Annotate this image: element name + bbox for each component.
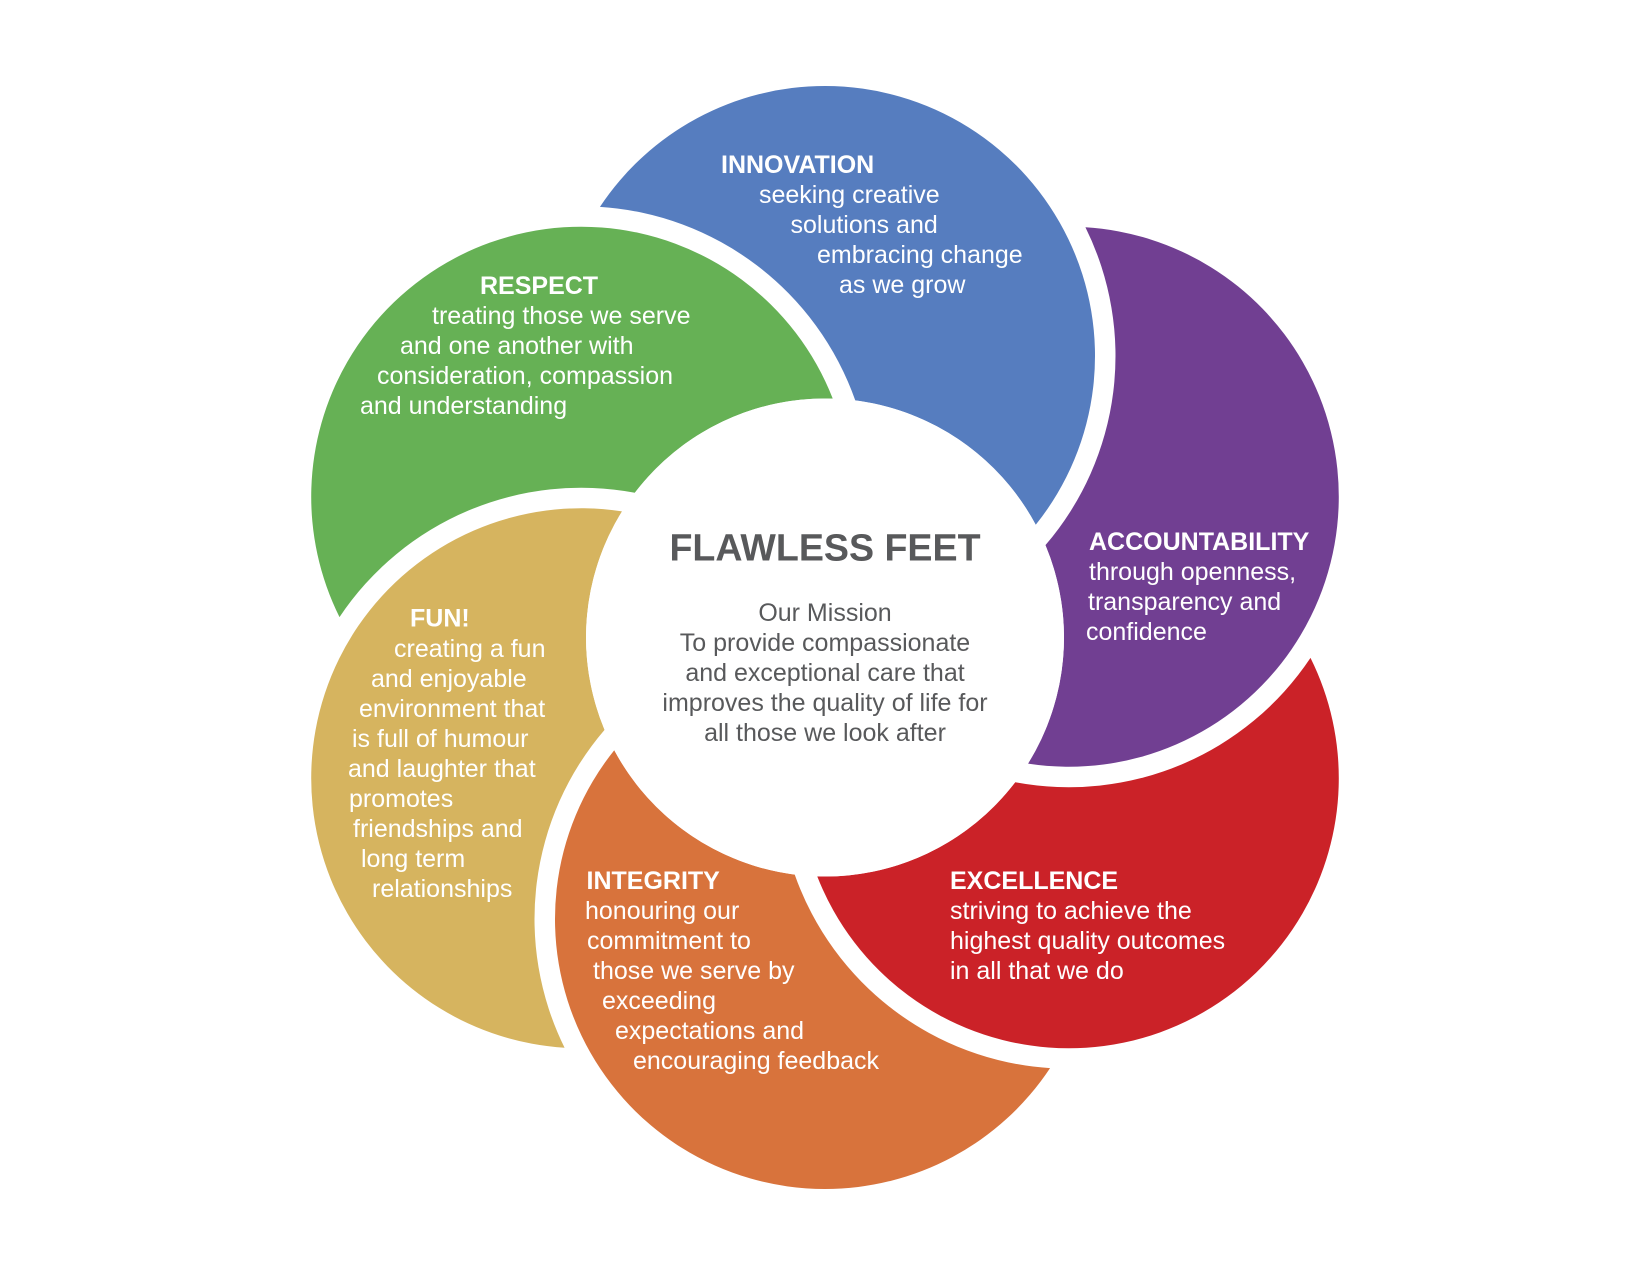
text: excellence description: in all that we do bbox=[950, 957, 1124, 985]
heading: excellence: EXCELLENCE bbox=[950, 867, 1118, 895]
petal: integrity orange bbox=[555, 750, 1050, 1189]
text: mission statement: To provide compassionate bbox=[680, 629, 970, 657]
heading: innovation: INNOVATION bbox=[721, 151, 874, 179]
text: fun description: promotes bbox=[349, 785, 453, 813]
text: fun description: relationships bbox=[372, 875, 512, 903]
center circle bbox=[586, 398, 1064, 876]
text: integrity description: those we serve by bbox=[593, 957, 795, 985]
text: innovation description: embracing change bbox=[817, 241, 1023, 269]
text: integrity description: honouring our bbox=[585, 897, 739, 925]
panel: fun bbox=[212, 460, 840, 1108]
text: fun description: creating a fun bbox=[394, 635, 546, 663]
text: integrity description: expectations and bbox=[615, 1017, 804, 1045]
heading: fun: FUN! bbox=[410, 604, 470, 632]
panel: respect bbox=[235, 128, 862, 776]
text: accountability description: transparency and bbox=[1088, 588, 1281, 616]
petal: innovation blue bbox=[600, 86, 1095, 525]
text: integrity description: encouraging feedback bbox=[633, 1047, 880, 1075]
petal: respect green bbox=[235, 128, 862, 776]
panel: central mission bbox=[586, 398, 1064, 876]
text: mission statement: Our Mission bbox=[758, 599, 892, 627]
text: fun description: and laughter that bbox=[348, 755, 536, 783]
title: FLAWLESS FEET bbox=[669, 526, 981, 568]
text: innovation description: solutions and bbox=[790, 211, 938, 239]
text: fun description: is full of humour bbox=[352, 725, 528, 753]
heading: accountability: ACCOUNTABILITY bbox=[1089, 528, 1310, 556]
panel: accountability bbox=[810, 167, 1438, 815]
text: excellence description: striving to achieve the bbox=[950, 897, 1192, 925]
text: mission statement: improves the quality of life for bbox=[662, 689, 988, 717]
panel: integrity bbox=[555, 750, 1050, 1189]
text: fun description: environment that bbox=[359, 695, 545, 723]
petal: excellence red bbox=[788, 499, 1415, 1147]
heading: respect: RESPECT bbox=[480, 272, 598, 300]
text: accountability description: confidence bbox=[1086, 618, 1207, 646]
text: mission statement: and exceptional care that bbox=[685, 659, 965, 687]
panel: innovation bbox=[600, 86, 1095, 525]
petal: accountability purple bbox=[810, 167, 1438, 815]
text: respect description: and understanding bbox=[360, 392, 567, 420]
text: integrity description: exceeding bbox=[602, 987, 716, 1015]
text: mission statement: all those we look after bbox=[704, 719, 946, 747]
text: integrity description: commitment to bbox=[587, 927, 751, 955]
text: accountability description: through openness, bbox=[1089, 558, 1296, 586]
panel: excellence bbox=[788, 499, 1415, 1147]
text: respect description: consideration, compassion bbox=[377, 362, 673, 390]
text: fun description: friendships and bbox=[353, 815, 523, 843]
text: innovation description: as we grow bbox=[839, 271, 966, 299]
text: fun description: and enjoyable bbox=[371, 665, 527, 693]
text: respect description: and one another with bbox=[400, 332, 634, 360]
heading: integrity: INTEGRITY bbox=[586, 867, 720, 895]
text: innovation description: seeking creative bbox=[759, 181, 940, 209]
text: fun description: long term bbox=[361, 845, 465, 873]
text: excellence description: highest quality outcomes bbox=[950, 927, 1225, 955]
petal: fun gold bbox=[212, 460, 840, 1108]
text: respect description: treating those we serve bbox=[432, 302, 690, 330]
